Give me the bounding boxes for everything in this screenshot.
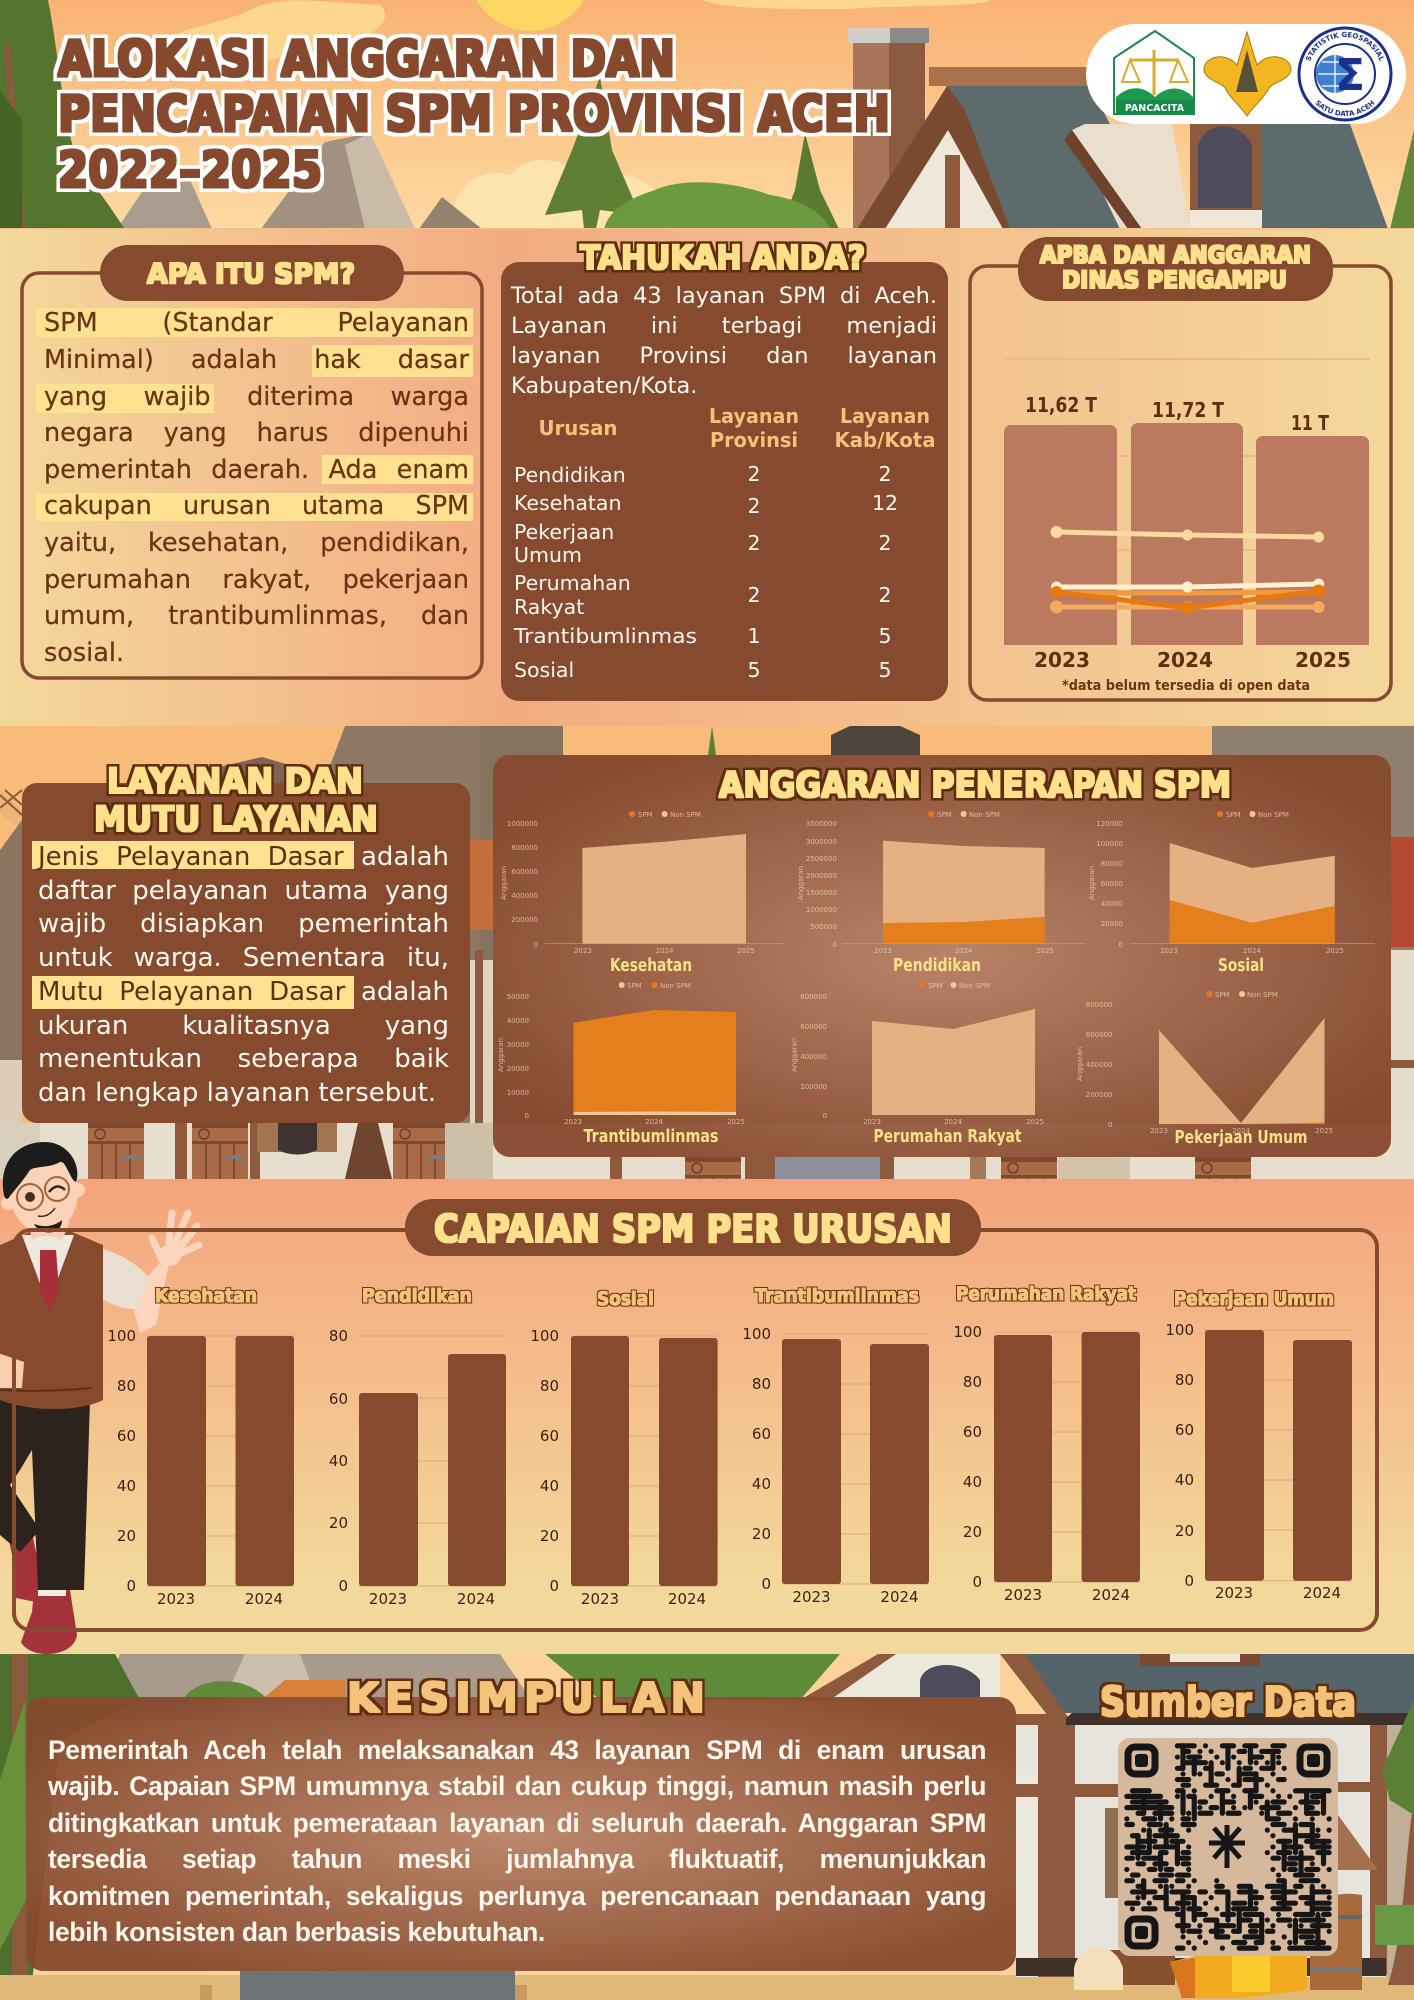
chart: capaian Kesehatan: 0 — [126, 1577, 136, 1595]
table: layanan per urusan: 2 — [878, 531, 892, 555]
text: tahukah anda intro: Total ada 43 layanan SPM di Aceh. — [511, 283, 937, 309]
text: apa itu SPM body: SPM (Standar Pelayanan — [44, 308, 469, 338]
chart: Kesehatan area: 0 — [534, 941, 538, 949]
table: layanan per urusan: Kesehatan — [514, 491, 621, 515]
chart: capaian Trantibumlinmas: 80 — [752, 1375, 771, 1393]
chart: Trantibumlinmas area: 20000 — [507, 1065, 529, 1073]
table: layanan per urusan: 2 — [747, 583, 761, 607]
panel: layanan dan mutu layanan: LAYANAN DAN — [107, 762, 363, 802]
text: layanan dan mutu layanan body: wajib disiapkan pemerintah — [38, 909, 449, 939]
chart: capaian Kesehatan: 2023 — [157, 1590, 195, 1608]
panel: layanan dan mutu layanan: MUTU LAYANAN — [94, 800, 378, 840]
text: layanan dan mutu layanan body: dan lengkap layanan tersebut. — [38, 1078, 436, 1108]
table: layanan per urusan: Rakyat — [514, 595, 584, 619]
chart: Trantibumlinmas area: 30000 — [507, 1041, 529, 1049]
text: tahukah anda intro: Kabupaten/Kota. — [511, 373, 697, 399]
logo: Aceh shield: PANCACITA — [1125, 103, 1185, 114]
chart: capaian Pekerjaan Umum: 60 — [1175, 1421, 1194, 1439]
chart: Kesehatan area: Kesehatan — [610, 955, 692, 976]
chart: capaian Sosial: 2023 — [581, 1590, 619, 1608]
chart: Perumahan Rakyat area: 800000 — [800, 993, 827, 1001]
text: apa itu SPM body: sosial. — [44, 638, 124, 668]
text: tahukah anda intro: layanan Provinsi dan layanan — [511, 343, 937, 369]
chart: Trantibumlinmas area: 40000 — [507, 1017, 529, 1025]
chart: capaian Pendidikan: 0 — [338, 1577, 348, 1595]
chart: Pendidikan area: Anggaran — [797, 866, 805, 900]
chart: Kesehatan area: 2023 — [574, 947, 592, 955]
panel: apa itu SPM: APA ITU SPM? — [147, 257, 355, 290]
chart: Pendidikan area: 2025 — [1036, 947, 1054, 955]
text: layanan dan mutu layanan body: Jenis Pelayanan Dasar adalah — [38, 842, 449, 872]
chart: capaian Pekerjaan Umum: 100 — [1165, 1321, 1194, 1339]
chart: capaian Sosial: 80 — [540, 1377, 559, 1395]
scene: bottom village background — [0, 1654, 1414, 2000]
chart: Pendidikan area: 2000000 — [806, 872, 837, 880]
text: kesimpulan body: ditingkatkan untuk pemerataan layanan di seluruh daerah. Anggaran SPM — [48, 1808, 986, 1838]
chart: capaian Pendidikan — [329, 1285, 506, 1608]
highlights: key phrases — [36, 308, 473, 521]
chart: Sosial area: 20000 — [1101, 920, 1123, 928]
chart: capaian Pendidikan: 20 — [329, 1514, 348, 1532]
band: top section background — [0, 229, 1414, 726]
panel: tahukah anda — [501, 238, 948, 701]
text: apa itu SPM body — [44, 308, 470, 668]
text: apa itu SPM body: yaitu, kesehatan, pendidikan, — [44, 528, 469, 558]
chart: APBA bars and budget lines: *data belum tersedia di open data — [1062, 678, 1310, 694]
text: layanan dan mutu layanan body — [36, 842, 449, 1108]
text: apa itu SPM body: cakupan urusan utama SPM — [44, 491, 469, 521]
logo: circular statistics badge: Σ — [1335, 50, 1365, 101]
highlights: defined terms — [32, 841, 354, 1009]
chart: Sosial area — [1088, 811, 1375, 976]
chart: Trantibumlinmas area: 50000 — [507, 993, 529, 1001]
chart: capaian Trantibumlinmas: 60 — [752, 1425, 771, 1443]
chart: Pekerjaan Umum area: 0 — [1108, 1121, 1112, 1129]
chart: Kesehatan area: Anggaran — [500, 866, 508, 900]
panel: APBA dan anggaran dinas pengampu — [970, 237, 1391, 700]
chart: Sosial area: 2025 — [1326, 947, 1344, 955]
chart: Pekerjaan Umum area: 2023 — [1150, 1127, 1168, 1135]
chart: Kesehatan area: SPM — [638, 811, 653, 819]
chart: Pendidikan area: SPM — [937, 811, 952, 819]
title: PENCAPAIAN SPM PROVINSI ACEH — [58, 85, 890, 143]
chart: Pekerjaan Umum area: 600000 — [1086, 1031, 1112, 1039]
chart: capaian Trantibumlinmas: 2023 — [792, 1588, 831, 1606]
chart: Trantibumlinmas area: 2023 — [564, 1118, 582, 1126]
chart: Pendidikan area: 2024 — [955, 947, 973, 955]
chart: capaian Trantibumlinmas: 0 — [761, 1575, 771, 1593]
chart: Pekerjaan Umum area: 400000 — [1086, 1061, 1112, 1069]
chart: capaian Perumahan Rakyat: Perumahan Rakyat — [956, 1283, 1136, 1305]
text: kesimpulan body: wajib. Capaian SPM umumnya stabil dan cukup tinggi, namun masih perlu — [48, 1771, 986, 1801]
chart: capaian Perumahan Rakyat: 0 — [972, 1573, 982, 1591]
chart: capaian Perumahan Rakyat: 80 — [963, 1373, 982, 1391]
chart: capaian Perumahan Rakyat: 60 — [963, 1423, 982, 1441]
chart: Pekerjaan Umum area: SPM — [1215, 991, 1230, 999]
logo: yellow flower — [1204, 32, 1291, 116]
table: layanan per urusan: Pekerjaan — [514, 520, 614, 544]
chart: Pendidikan area — [797, 811, 1085, 976]
logo: circular statistics badge: SATU DATA ACEH — [1316, 100, 1375, 116]
text: apa itu SPM body: pemerintah daerah. Ada enam — [44, 455, 469, 485]
chart: Kesehatan area: 200000 — [511, 916, 538, 924]
text: apa itu SPM body: yang wajib diterima warga — [44, 382, 469, 412]
chart: capaian Pekerjaan Umum: 80 — [1175, 1371, 1194, 1389]
chart: capaian Kesehatan: 60 — [117, 1427, 136, 1445]
chart: Sosial area: 0 — [1119, 941, 1123, 949]
table: layanan per urusan: 1 — [747, 624, 761, 648]
chart: capaian Pekerjaan Umum: Pekerjaan Umum — [1174, 1288, 1334, 1310]
chart: capaian Kesehatan: 80 — [117, 1377, 136, 1395]
chart: capaian Perumahan Rakyat: 2023 — [1004, 1586, 1042, 1604]
table: layanan per urusan: 2 — [878, 583, 892, 607]
chart: Pekerjaan Umum area: Non SPM — [1247, 991, 1278, 999]
panel: capaian SPM per urusan: CAPAIAN SPM PER URUSAN — [434, 1207, 952, 1251]
chart: Kesehatan area: 2025 — [737, 947, 755, 955]
chart: APBA bars and budget lines: 2024 — [1157, 648, 1213, 672]
chart: Kesehatan area — [500, 811, 785, 976]
chart: Pekerjaan Umum area: Anggaran — [1076, 1047, 1084, 1081]
chart: Perumahan Rakyat area: 600000 — [800, 1023, 827, 1031]
text: kesimpulan body: Pemerintah Aceh telah melaksanakan 43 layanan SPM di enam urusan — [48, 1735, 986, 1765]
table: layanan per urusan: Umum — [514, 543, 582, 567]
table: layanan per urusan — [513, 404, 936, 682]
chart: Perumahan Rakyat area: 2023 — [863, 1118, 881, 1126]
chart: capaian Sosial: 20 — [540, 1527, 559, 1545]
panel: kesimpulan: KESIMPULAN — [347, 1674, 705, 1722]
chart: capaian Pendidikan: 2024 — [457, 1590, 495, 1608]
chart: capaian Pendidikan: 80 — [329, 1327, 348, 1345]
chart: capaian Pendidikan: 2023 — [369, 1590, 407, 1608]
scene: middle village background — [0, 726, 1414, 1218]
text: kesimpulan body: komitmen pemerintah, sekaligus perlunya perencanaan pendanaan yang — [48, 1881, 986, 1911]
chart: capaian Perumahan Rakyat: 20 — [963, 1523, 982, 1541]
chart: Sosial area: 2024 — [1243, 947, 1261, 955]
text: apa itu SPM body: umum, trantibumlinmas, dan — [44, 601, 469, 631]
table: layanan per urusan: Layanan — [840, 404, 930, 428]
chart: capaian Pekerjaan Umum: 20 — [1175, 1522, 1194, 1540]
text: apa itu SPM body: negara yang harus dipenuhi — [44, 418, 469, 448]
chart: Trantibumlinmas area — [497, 982, 745, 1147]
chart: capaian Sosial: 0 — [549, 1577, 559, 1595]
chart: capaian Trantibumlinmas: 2024 — [880, 1588, 919, 1606]
sumber data heading: Sumber Data — [1100, 1678, 1356, 1726]
band: achievement section background — [0, 1179, 1414, 1654]
chart: Sosial area: 40000 — [1101, 900, 1123, 908]
chart: Trantibumlinmas area: Anggaran — [497, 1038, 505, 1072]
panel: kesimpulan — [26, 1674, 1016, 1971]
chart: Perumahan Rakyat area: 400000 — [800, 1053, 827, 1061]
table: layanan per urusan: 5 — [878, 658, 892, 682]
table: layanan per urusan: 5 — [878, 624, 892, 648]
chart: Pekerjaan Umum area — [1076, 991, 1333, 1148]
scene: header village background — [0, 0, 1414, 230]
chart: Pendidikan area: 1000000 — [806, 906, 837, 914]
chart: APBA bars and budget lines — [1004, 359, 1370, 694]
table: layanan per urusan: 2 — [747, 462, 761, 486]
text: kesimpulan body: lebih konsisten dan berbasis kebutuhan. — [48, 1917, 545, 1947]
chart: APBA bars and budget lines: 11 T — [1291, 411, 1329, 435]
chart: capaian Perumahan Rakyat — [953, 1283, 1140, 1604]
chart: capaian Sosial — [530, 1288, 718, 1608]
table: layanan per urusan: Layanan — [709, 404, 799, 428]
text: apa itu SPM body: perumahan rakyat, pekerjaan — [44, 565, 469, 595]
chart: Pendidikan area: 3000000 — [806, 838, 837, 846]
chart: Perumahan Rakyat area: 200000 — [800, 1083, 827, 1091]
chart: capaian Perumahan Rakyat: 2024 — [1092, 1586, 1130, 1604]
chart: capaian Pekerjaan Umum: 40 — [1175, 1471, 1194, 1489]
chart: Trantibumlinmas area: SPM — [627, 982, 642, 990]
chart: capaian Pendidikan: 40 — [329, 1452, 348, 1470]
chart: capaian Trantibumlinmas: Trantibumlinmas — [755, 1285, 919, 1307]
text: layanan dan mutu layanan body: daftar pelayanan utama yang — [38, 876, 449, 906]
text: layanan dan mutu layanan body: untuk warga. Sementara itu, — [38, 943, 449, 973]
chart: capaian Kesehatan: 2024 — [245, 1590, 283, 1608]
chart: Kesehatan area: 2024 — [656, 947, 674, 955]
chart: Pekerjaan Umum area: 2024 — [1232, 1127, 1250, 1135]
chart: Perumahan Rakyat area: SPM — [928, 982, 943, 990]
chart: Kesehatan area: Non SPM — [670, 811, 701, 819]
chart: Sosial area: Sosial — [1218, 955, 1264, 976]
chart: APBA bars and budget lines: 2025 — [1295, 648, 1351, 672]
chart: Pendidikan area: 3500000 — [806, 820, 837, 828]
icon: asterisk at QR center — [1209, 1825, 1245, 1868]
chart: Trantibumlinmas area: 2025 — [727, 1118, 745, 1126]
chart: capaian Sosial: 100 — [530, 1327, 559, 1345]
chart: Perumahan Rakyat area — [790, 982, 1044, 1147]
title: 2022–2025 — [58, 141, 322, 199]
chart: Kesehatan area: 1000000 — [507, 820, 538, 828]
text: apa itu SPM body: Minimal) adalah hak dasar — [44, 345, 469, 375]
panel: APBA dan anggaran dinas pengampu: APBA DAN ANGGARAN — [1040, 241, 1311, 269]
text: layanan dan mutu layanan body: Mutu Pelayanan Dasar adalah — [38, 977, 449, 1007]
table: layanan per urusan: 2 — [747, 531, 761, 555]
chart: Sosial area: 100000 — [1096, 840, 1123, 848]
table: layanan per urusan: Trantibumlinmas — [513, 624, 697, 648]
chart: Sosial area: Non SPM — [1258, 811, 1289, 819]
title: ALOKASI ANGGARAN DAN — [58, 30, 675, 88]
table: layanan per urusan: 2 — [747, 494, 761, 518]
chart: Pendidikan area: 2500000 — [806, 855, 837, 863]
chart: Pendidikan area: 500000 — [810, 923, 837, 931]
chart: Pendidikan area: 1500000 — [806, 889, 837, 897]
chart: capaian Pendidikan: Pendidikan — [362, 1285, 472, 1307]
panel: tahukah anda: TAHUKAH ANDA? — [580, 238, 865, 277]
chart: Sosial area: 60000 — [1101, 880, 1123, 888]
logo: Aceh shield — [1114, 31, 1194, 114]
chart: capaian Kesehatan: Kesehatan — [155, 1285, 257, 1307]
chart: Trantibumlinmas area: Trantibumlinmas — [584, 1126, 718, 1147]
chart: Perumahan Rakyat area: 2025 — [1026, 1118, 1044, 1126]
chart: Perumahan Rakyat area: Non SPM — [959, 982, 990, 990]
chart: capaian Sosial: 60 — [540, 1427, 559, 1445]
text: layanan dan mutu layanan body: ukuran kualitasnya yang — [38, 1011, 449, 1041]
chart: capaian Kesehatan: 100 — [107, 1327, 136, 1345]
chart: Pekerjaan Umum area: 800000 — [1086, 1001, 1112, 1009]
chart: Trantibumlinmas area: 10000 — [507, 1089, 529, 1097]
logo: circular statistics badge: STATISTIK GEOSPASIAL — [1306, 32, 1384, 62]
panel: anggaran penerapan SPM — [493, 755, 1391, 1157]
text: kesimpulan body — [48, 1735, 986, 1947]
title — [58, 30, 890, 199]
table: layanan per urusan: 12 — [872, 491, 898, 515]
panel: anggaran penerapan SPM: ANGGARAN PENERAPAN SPM — [719, 765, 1231, 806]
chart: capaian Trantibumlinmas — [742, 1285, 929, 1606]
table: layanan per urusan: Sosial — [514, 658, 574, 682]
table: layanan per urusan: Kab/Kota — [834, 428, 936, 452]
chart: APBA bars and budget lines: 11,62 T — [1025, 393, 1097, 417]
character: waving man with glasses — [0, 1142, 199, 1654]
chart: Sosial area: Anggaran — [1088, 866, 1096, 900]
chart: Trantibumlinmas area: 2024 — [645, 1118, 663, 1126]
chart: Pekerjaan Umum area: 2025 — [1315, 1127, 1333, 1135]
chart: Trantibumlinmas area: Non SPM — [660, 982, 691, 990]
chart: Pekerjaan Umum area: 200000 — [1086, 1091, 1112, 1099]
logo: circular statistics badge — [1298, 26, 1392, 122]
table: layanan per urusan: 2 — [878, 462, 892, 486]
logo pill — [1086, 24, 1406, 124]
chart: capaian Sosial: 2024 — [668, 1590, 706, 1608]
chart: Sosial area: 80000 — [1101, 860, 1123, 868]
chart: capaian Pekerjaan Umum: 2023 — [1215, 1584, 1253, 1602]
table: layanan per urusan: Pendidikan — [514, 463, 626, 487]
panel: APBA dan anggaran dinas pengampu: DINAS PENGAMPU — [1062, 266, 1287, 294]
panel: layanan dan mutu layanan — [22, 762, 470, 1123]
text: layanan dan mutu layanan body: menentukan seberapa baik — [38, 1044, 449, 1074]
chart: Pendidikan area: Pendidikan — [893, 955, 981, 976]
chart: Kesehatan area: 600000 — [511, 868, 538, 876]
chart: Pendidikan area: 0 — [833, 941, 837, 949]
table: layanan per urusan: Urusan — [538, 416, 618, 440]
panel: capaian SPM per urusan — [14, 1199, 1377, 1630]
chart: capaian Perumahan Rakyat: 100 — [953, 1323, 982, 1341]
chart: capaian Pekerjaan Umum: 2024 — [1303, 1584, 1341, 1602]
chart: Trantibumlinmas area: 0 — [525, 1112, 529, 1120]
chart: Perumahan Rakyat area: Perumahan Rakyat — [874, 1126, 1022, 1147]
table: layanan per urusan: 5 — [747, 658, 761, 682]
table: layanan per urusan: Perumahan — [514, 571, 631, 595]
chart: capaian Trantibumlinmas: 100 — [742, 1325, 771, 1343]
chart: capaian Sosial: Sosial — [597, 1288, 654, 1310]
chart: Perumahan Rakyat area: 0 — [823, 1112, 827, 1120]
chart: Pendidikan area: Non SPM — [969, 811, 1000, 819]
chart: APBA bars and budget lines: 11,72 T — [1152, 398, 1224, 422]
text: tahukah anda intro: Layanan ini terbagi menjadi — [511, 313, 937, 339]
chart: capaian Trantibumlinmas: 40 — [752, 1475, 771, 1493]
chart: capaian Perumahan Rakyat: 40 — [963, 1473, 982, 1491]
QR code — [1118, 1738, 1338, 1956]
chart: capaian Pendidikan: 60 — [329, 1390, 348, 1408]
chart: Pendidikan area: 2023 — [874, 947, 892, 955]
chart: Sosial area: 120000 — [1096, 820, 1123, 828]
panel: apa itu SPM — [22, 245, 482, 678]
chart: APBA bars and budget lines: 2023 — [1034, 648, 1090, 672]
chart: capaian Kesehatan — [107, 1285, 294, 1608]
chart: Sosial area: 2023 — [1160, 947, 1178, 955]
chart: capaian Trantibumlinmas: 20 — [752, 1525, 771, 1543]
chart: capaian Sosial: 40 — [540, 1477, 559, 1495]
chart: Sosial area: SPM — [1226, 811, 1241, 819]
chart: capaian Pekerjaan Umum: 0 — [1184, 1572, 1194, 1590]
table: layanan per urusan: Provinsi — [710, 428, 798, 452]
chart: capaian Kesehatan: 40 — [117, 1477, 136, 1495]
text: kesimpulan body: tersedia setiap tahun meski jumlahnya fluktuatif, menunjukkan — [48, 1844, 986, 1874]
text: tahukah anda intro — [510, 283, 937, 399]
chart: capaian Kesehatan: 20 — [117, 1527, 136, 1545]
chart: Pekerjaan Umum area: Pekerjaan Umum — [1174, 1127, 1308, 1148]
chart: Perumahan Rakyat area: 2024 — [944, 1118, 962, 1126]
chart: Kesehatan area: 800000 — [511, 844, 538, 852]
chart: Perumahan Rakyat area: Anggaran — [790, 1038, 798, 1072]
chart: Kesehatan area: 400000 — [511, 892, 538, 900]
chart: capaian Pekerjaan Umum — [1165, 1288, 1352, 1602]
